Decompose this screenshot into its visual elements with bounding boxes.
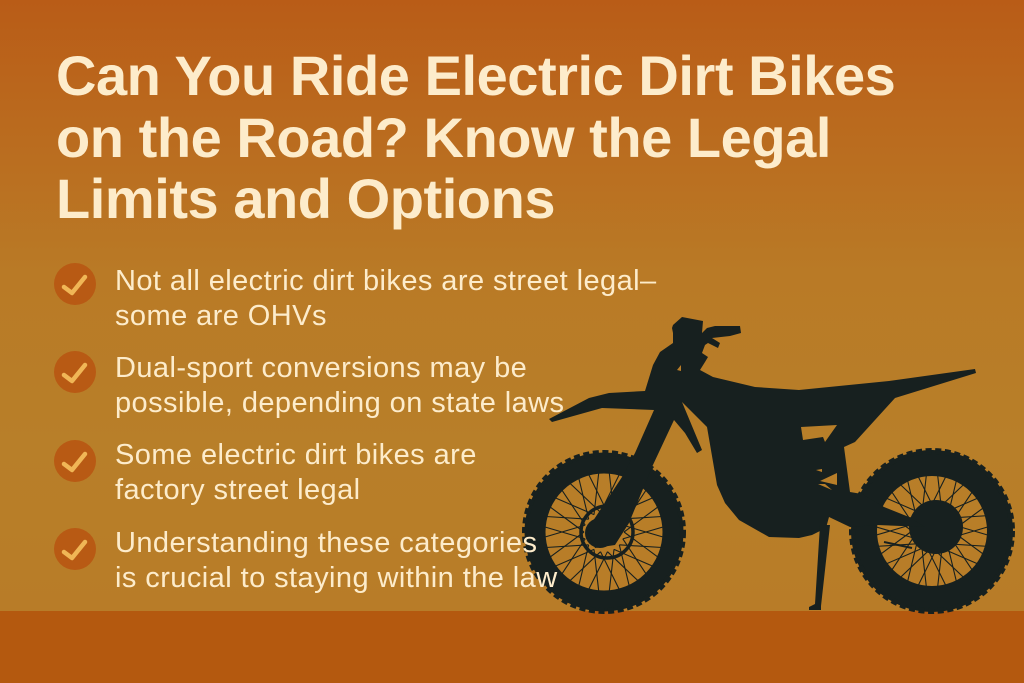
check icon 2 bbox=[54, 351, 96, 393]
check icon 3 bbox=[54, 440, 96, 482]
front wheel bbox=[525, 453, 683, 611]
bike frame, body, fork and handlebars bbox=[549, 317, 976, 548]
kickstand bbox=[809, 525, 830, 610]
bullet text 4: Understanding these categories bbox=[115, 527, 537, 559]
bullet text 3: Some electric dirt bikes are bbox=[115, 439, 477, 471]
title: on the Road? Know the Legal bbox=[56, 106, 831, 168]
bullet text 2: Dual-sport conversions may be bbox=[115, 352, 527, 384]
check icon 1 bbox=[54, 263, 96, 305]
bullet text 1 bbox=[115, 265, 657, 332]
title bbox=[56, 44, 895, 230]
bullet text 1: Not all electric dirt bikes are street legal– bbox=[115, 265, 657, 297]
bullet text 4 bbox=[115, 527, 558, 594]
bullet text 2 bbox=[115, 352, 564, 419]
rear wheel bbox=[852, 451, 1012, 611]
bullet text 3 bbox=[115, 439, 477, 506]
bullet text 4: is crucial to staying within the law bbox=[115, 562, 558, 594]
ground band bbox=[0, 611, 1024, 683]
check icon 4 bbox=[54, 528, 96, 570]
title: Can You Ride Electric Dirt Bikes bbox=[56, 44, 895, 107]
bullet text 3: factory street legal bbox=[115, 474, 361, 506]
title: Limits and Options bbox=[56, 167, 555, 230]
bullet text 2: possible, depending on state laws bbox=[115, 387, 564, 419]
bullet text 1: some are OHVs bbox=[115, 300, 327, 332]
